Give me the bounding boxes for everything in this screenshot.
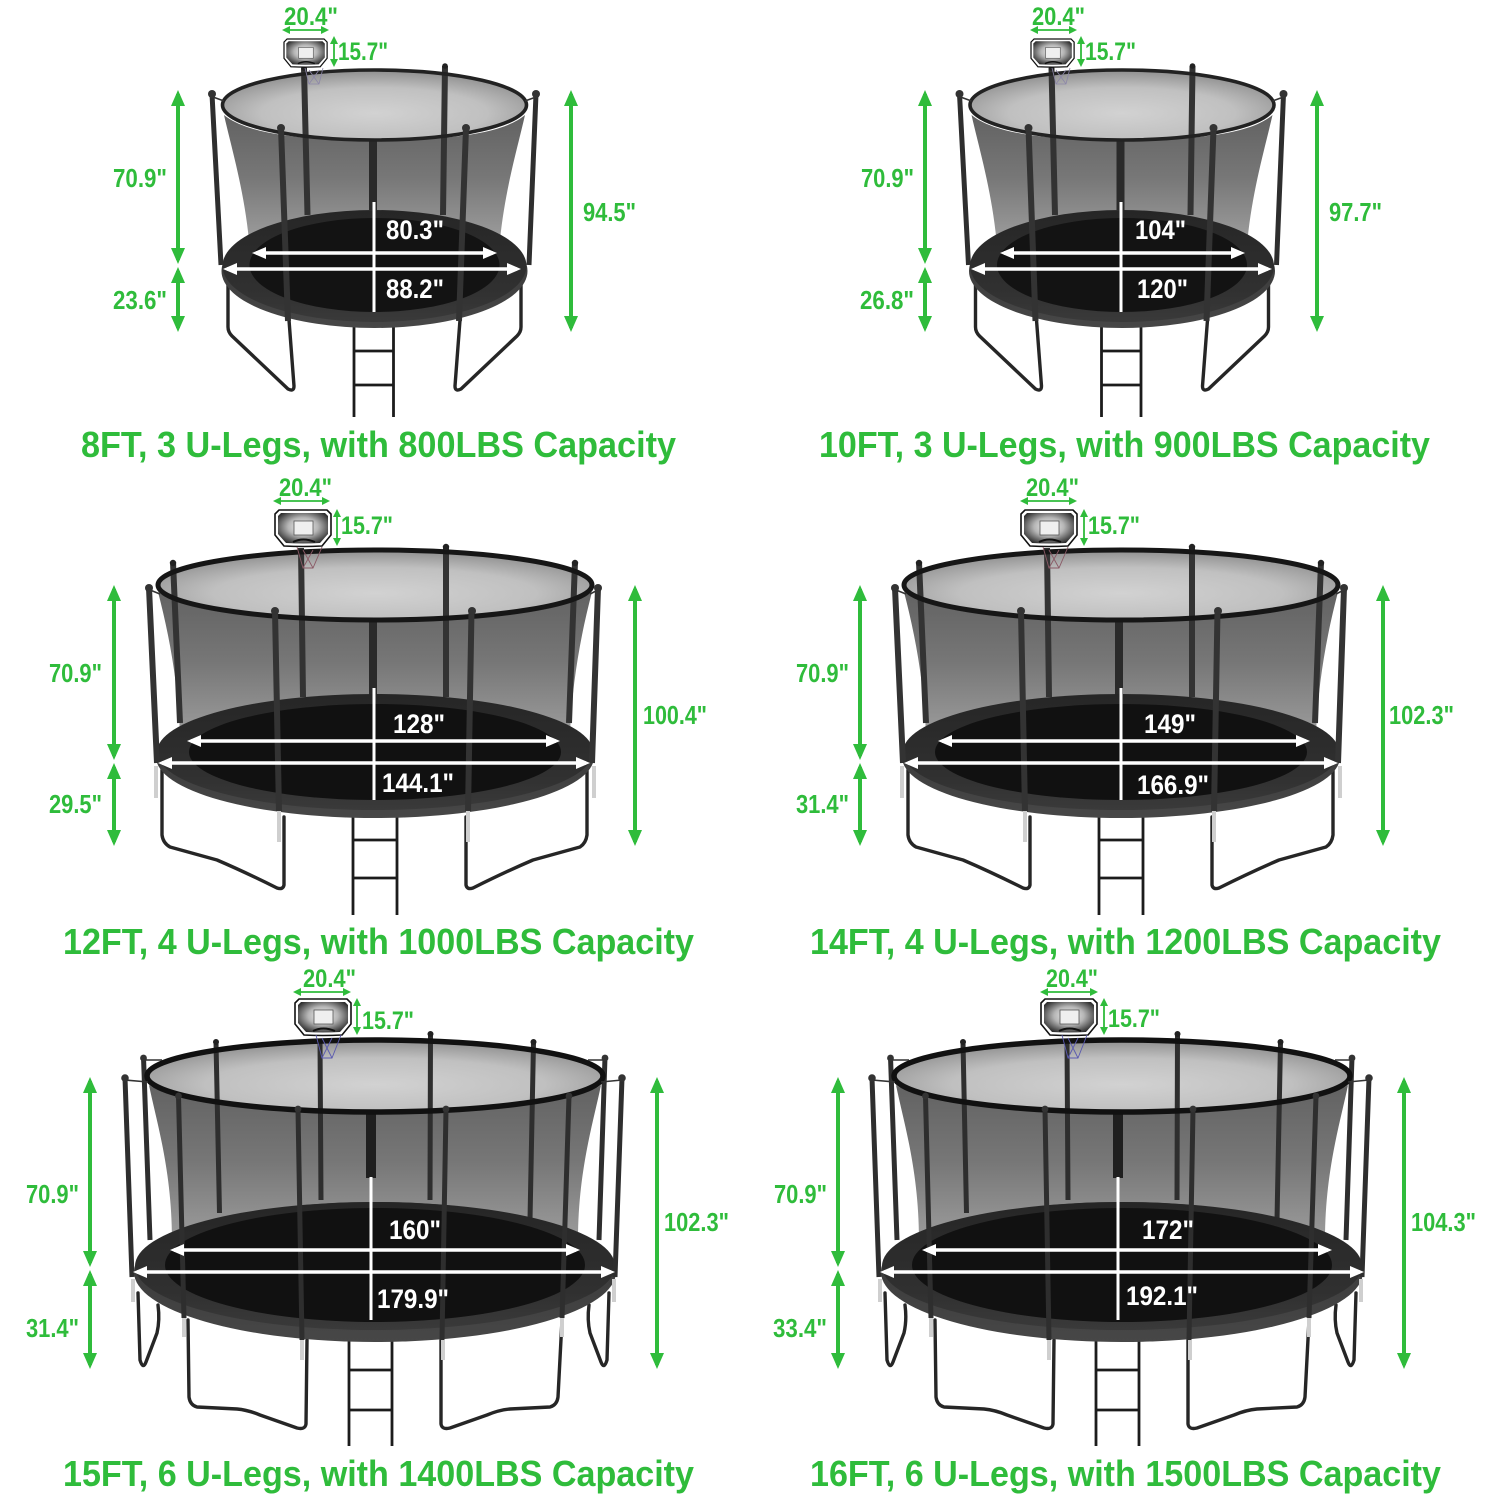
mat diameter dimensions: 166.9" — [1137, 770, 1209, 800]
total height dimension: 94.5" — [583, 197, 636, 227]
frame height dimension: 29.5" — [49, 789, 102, 819]
icon: basketball hoop 8FT — [284, 39, 327, 84]
mat diameter dimensions: 179.9" — [377, 1284, 449, 1314]
caption: 10FT: 10FT, 3 U-Legs, with 900LBS Capacity — [819, 424, 1430, 465]
frame height dimension — [773, 1274, 838, 1365]
net height dimension: 70.9" — [26, 1179, 79, 1209]
icon: basketball hoop 15FT — [295, 999, 351, 1058]
icon: basketball hoop 10FT — [1031, 39, 1074, 84]
hoop height dimension — [357, 1001, 414, 1035]
panel: 14FT trampoline — [796, 474, 1454, 962]
net height dimension: 70.9" — [861, 163, 914, 193]
trampoline illustration: 12FT — [145, 544, 602, 915]
frame height dimension: 31.4" — [796, 789, 849, 819]
hoop height dimension: 15.7" — [341, 512, 393, 540]
panel: 8FT trampoline — [81, 3, 676, 465]
hoop width dimension: 20.4" — [279, 474, 332, 502]
frame height dimension: 26.8" — [860, 285, 914, 315]
total height dimension: 104.3" — [1411, 1207, 1476, 1237]
frame height dimension — [26, 1274, 90, 1365]
hoop width dimension: 20.4" — [284, 3, 338, 31]
frame height dimension: 33.4" — [773, 1313, 827, 1343]
icon: basketball hoop 12FT — [275, 510, 331, 568]
trampoline illustration: 8FT — [208, 63, 540, 417]
hoop width dimension: 20.4" — [1032, 3, 1085, 31]
mat diameter dimensions: 144.1" — [382, 768, 454, 798]
hoop width dimension: 20.4" — [1046, 965, 1098, 993]
caption: 14FT: 14FT, 4 U-Legs, with 1200LBS Capacity — [810, 921, 1441, 962]
frame height dimension — [796, 767, 860, 842]
mat diameter dimensions: 128" — [393, 709, 445, 739]
mat diameter dimensions: 104" — [1135, 215, 1186, 245]
hoop height dimension: 15.7" — [1088, 512, 1140, 540]
mat diameter dimensions — [227, 202, 517, 312]
mat diameter dimensions: 149" — [1144, 709, 1196, 739]
mat diameter dimensions: 192.1" — [1126, 1281, 1198, 1311]
panel: 16FT trampoline — [773, 965, 1476, 1494]
icon: basketball hoop 16FT — [1041, 999, 1097, 1058]
net height dimension: 70.9" — [796, 658, 849, 688]
frame height dimension — [49, 767, 114, 842]
total height dimension: 102.3" — [1389, 700, 1454, 730]
total height dimension: 102.3" — [664, 1207, 729, 1237]
caption: 15FT: 15FT, 6 U-Legs, with 1400LBS Capacity — [63, 1453, 694, 1494]
mat diameter dimensions: 88.2" — [386, 274, 444, 304]
mat diameter dimensions: 120" — [1137, 274, 1188, 304]
caption: 8FT: 8FT, 3 U-Legs, with 800LBS Capacity — [81, 424, 676, 465]
mat diameter dimensions — [162, 688, 586, 800]
panel: 12FT trampoline — [49, 474, 707, 962]
panel: 10FT trampoline — [819, 3, 1430, 465]
frame height dimension: 31.4" — [26, 1313, 79, 1343]
mat diameter dimensions: 160" — [389, 1215, 441, 1245]
total height dimension: 97.7" — [1329, 197, 1382, 227]
frame height dimension — [860, 271, 925, 328]
trampoline illustration: 10FT — [956, 63, 1288, 417]
mat diameter dimensions — [137, 1177, 611, 1320]
trampoline illustration: 14FT — [891, 544, 1348, 915]
mat diameter dimensions: 80.3" — [386, 215, 444, 245]
hoop width dimension: 20.4" — [1026, 474, 1079, 502]
caption: 12FT: 12FT, 4 U-Legs, with 1000LBS Capacity — [63, 921, 694, 962]
hoop height dimension: 15.7" — [1108, 1005, 1160, 1033]
caption: 16FT: 16FT, 6 U-Legs, with 1500LBS Capacity — [810, 1453, 1441, 1494]
net height dimension: 70.9" — [774, 1179, 827, 1209]
mat diameter dimensions — [975, 202, 1268, 312]
frame height dimension — [113, 271, 178, 328]
hoop width dimension: 20.4" — [303, 965, 356, 993]
mat diameter dimensions — [908, 688, 1334, 800]
trampoline illustration: 15FT — [121, 1031, 626, 1446]
net height dimension: 70.9" — [49, 658, 102, 688]
total height dimension: 100.4" — [643, 700, 707, 730]
hoop height dimension: 15.7" — [338, 38, 388, 66]
icon: basketball hoop 14FT — [1021, 510, 1077, 568]
frame height dimension: 23.6" — [113, 285, 167, 315]
mat diameter dimensions — [884, 1177, 1360, 1320]
hoop height dimension: 15.7" — [362, 1007, 414, 1035]
hoop height dimension: 15.7" — [1085, 38, 1136, 66]
panel: 15FT trampoline — [26, 965, 729, 1494]
trampoline illustration: 16FT — [868, 1031, 1373, 1446]
mat diameter dimensions: 172" — [1142, 1215, 1194, 1245]
net height dimension: 70.9" — [113, 163, 167, 193]
